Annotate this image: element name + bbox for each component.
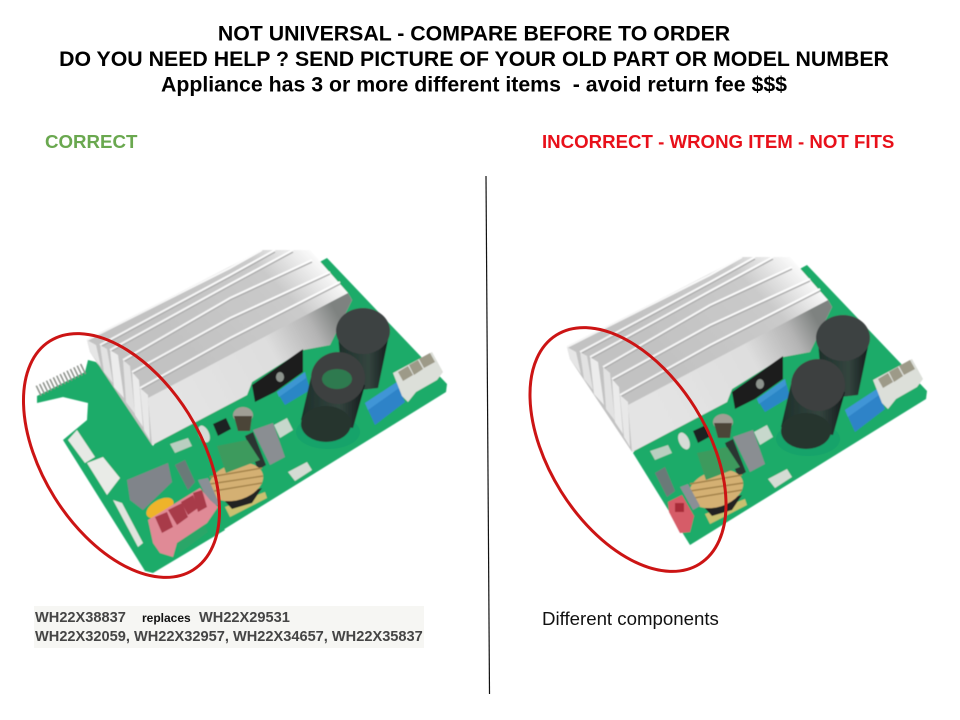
small gray component	[655, 467, 675, 497]
photo: correct circuit board	[37, 250, 447, 573]
photo: incorrect circuit board	[567, 257, 927, 545]
gray housing right	[680, 484, 700, 510]
replacement part numbers: replaces	[142, 611, 191, 625]
red connector	[148, 488, 218, 557]
title heading	[59, 22, 889, 96]
title heading: Appliance has 3 or more different items - avoid return fee $$$	[161, 72, 787, 96]
shared board and heat sink	[87, 250, 447, 538]
red ellipse: correct highlight	[0, 299, 260, 612]
replacement part numbers: WH22X29531	[199, 610, 290, 626]
note: different components: Different components	[542, 608, 719, 629]
title heading: NOT UNIVERSAL - COMPARE BEFORE TO ORDER	[218, 22, 730, 46]
heading: incorrect: INCORRECT - WRONG ITEM - NOT FITS	[542, 131, 894, 152]
yellow capacitor	[143, 494, 177, 522]
gray housing	[198, 478, 220, 505]
capacitor top marking	[322, 369, 352, 389]
replacement part numbers: WH22X32059, WH22X32957, WH22X34657, WH22X35837	[35, 629, 423, 645]
replacement part numbers	[34, 606, 424, 648]
board extension with connector section	[37, 360, 225, 573]
white connectors	[68, 430, 120, 495]
red ellipse: incorrect highlight	[489, 293, 767, 606]
dark gray component	[175, 460, 195, 490]
title heading: DO YOU NEED HELP ? SEND PICTURE OF YOUR OLD PART OR MODEL NUMBER	[59, 47, 889, 71]
fuse	[113, 500, 143, 547]
comb teeth	[38, 368, 85, 391]
center divider line	[486, 176, 490, 694]
replacement part numbers: WH22X38837	[35, 610, 126, 626]
shared board and heat sink	[567, 257, 927, 545]
small red connector	[668, 495, 694, 533]
heading: correct: CORRECT	[45, 131, 138, 152]
gray capacitor	[127, 463, 172, 510]
